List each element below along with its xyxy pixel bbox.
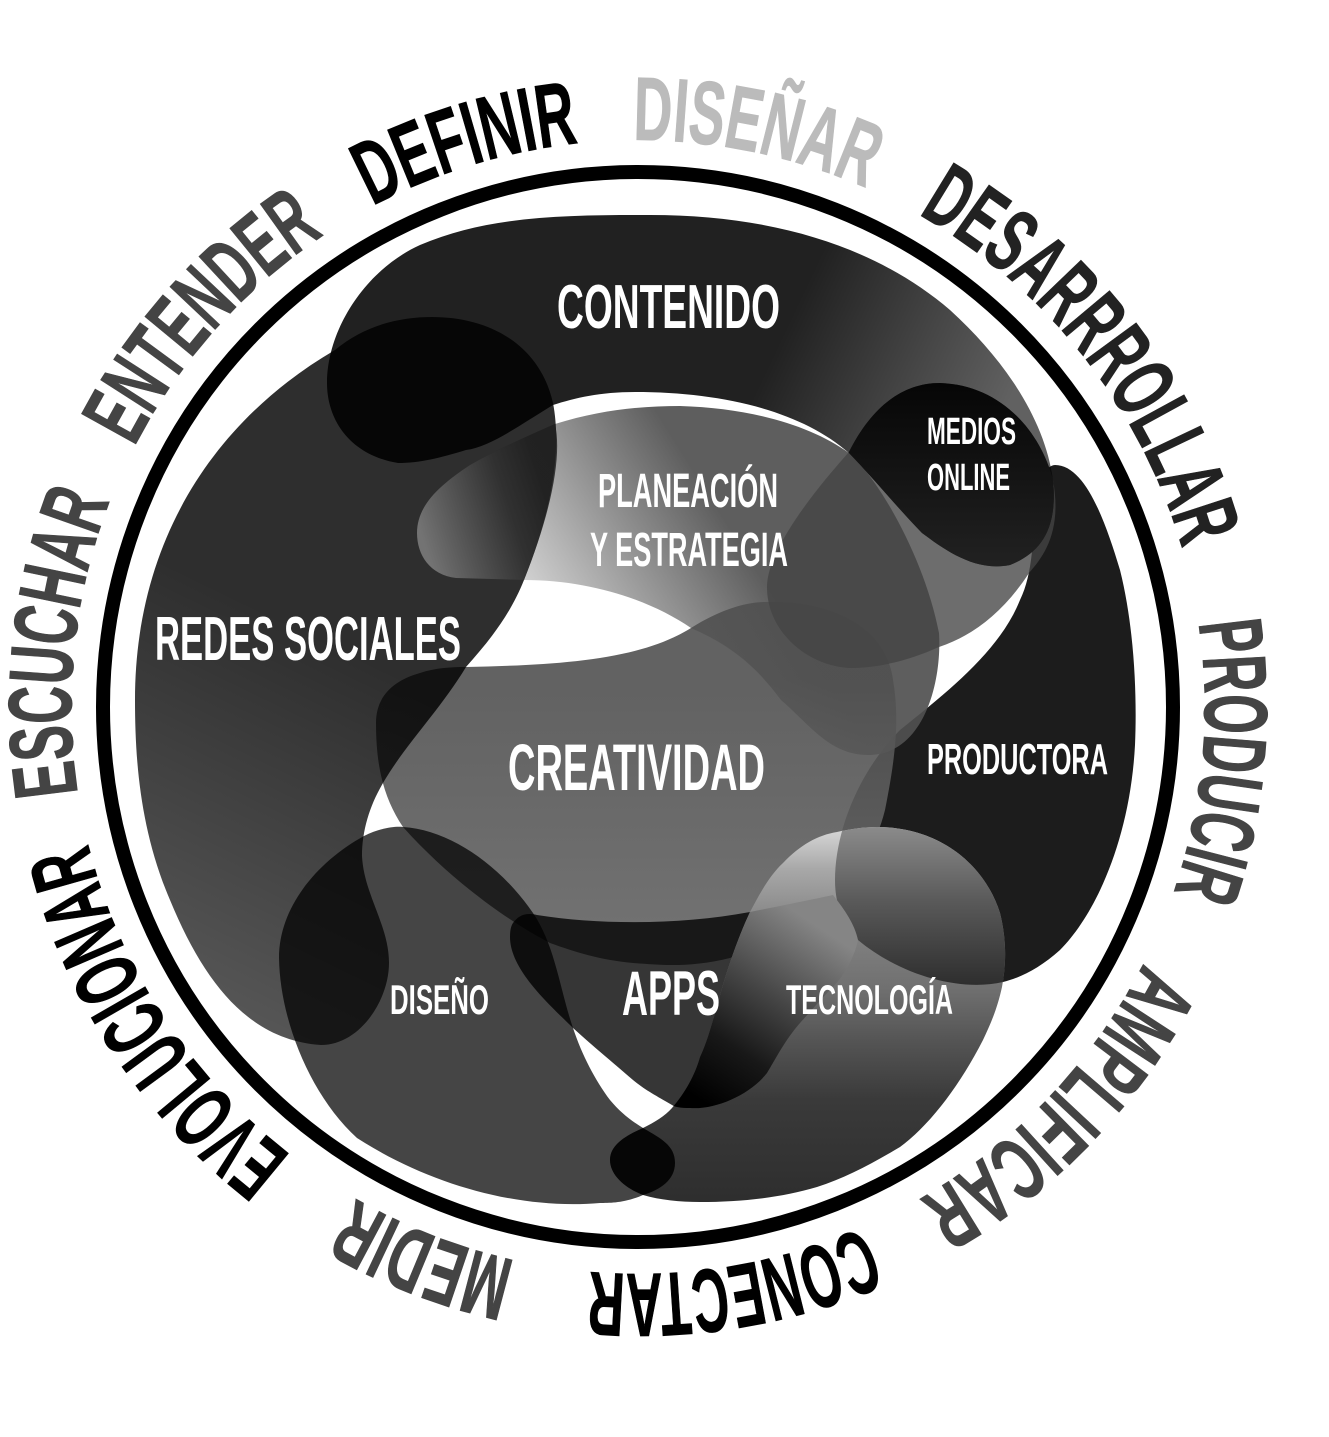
label: apps: APPS — [622, 959, 720, 1029]
outer word: desarrrollar: DESARRROLLAR — [920, 162, 1238, 548]
blob: planeación lobe over redes — [417, 424, 557, 580]
outer word: evolucionar: EVOLUCIONAR — [32, 844, 289, 1202]
blob: contenido — [327, 215, 1054, 566]
label: contenido: CONTENIDO — [557, 273, 780, 342]
ring — [103, 172, 1173, 1242]
overlaps inside tecnología — [610, 827, 1005, 1195]
blob: medios inside contenido — [848, 383, 1054, 566]
label: productora: PRODUCTORA — [927, 735, 1108, 784]
label: online: ONLINE — [927, 457, 1010, 499]
blob: creatividad — [376, 602, 896, 965]
outer word: amplificar: AMPLIFICAR — [919, 964, 1192, 1246]
outer word: diseñar: DISEÑAR — [636, 77, 882, 188]
label: creatividad: CREATIVIDAD — [508, 730, 765, 804]
blob: planeación y estrategia — [417, 406, 939, 755]
blob: productora — [835, 465, 1136, 985]
blob: apps — [510, 895, 858, 1108]
outer word: producir: PRODUCIR — [1174, 618, 1268, 904]
label: medios: MEDIOS — [927, 411, 1016, 453]
label: diseño: DISEÑO — [390, 976, 489, 1023]
blob: medios online — [767, 383, 1055, 668]
blob: redes sociales — [135, 317, 556, 1045]
outer word: definir: DEFINIR — [348, 83, 578, 205]
label: y estrategia: Y ESTRATEGIA — [590, 524, 788, 577]
outer word: entender: ENTENDER — [81, 190, 324, 444]
blob: diseño — [279, 827, 675, 1204]
outer word: conectar: CONECTAR — [590, 1232, 878, 1336]
blob: tecnología — [610, 827, 1005, 1202]
outer word: medir: MEDIR — [333, 1198, 512, 1320]
label: redes sociales: REDES SOCIALES — [155, 605, 461, 674]
label: planeación: PLANEACIÓN — [598, 463, 778, 518]
label: tecnología: TECNOLOGÍA — [786, 976, 953, 1023]
